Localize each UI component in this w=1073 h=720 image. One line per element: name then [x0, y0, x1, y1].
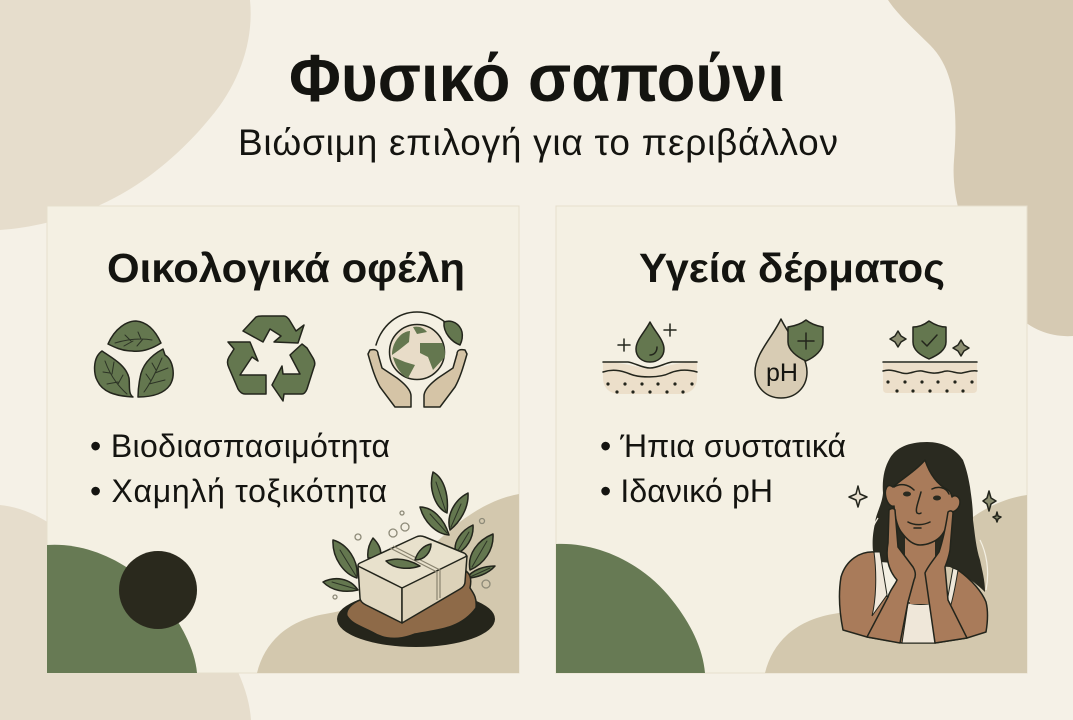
left hand and arm: [867, 508, 915, 643]
panel decor: tan blob: [257, 494, 519, 673]
right hand and arm: [925, 511, 967, 643]
background blob: bottom left: [0, 505, 251, 720]
icon: three leaves cycle: [95, 321, 173, 397]
heading: ecological benefits: Οικολογικά οφέλη: [107, 245, 465, 291]
bullet: ideal pH: • Ιδανικό pH: [600, 473, 773, 509]
facial features: [894, 485, 949, 528]
panel: ecological benefits: [47, 206, 519, 673]
bullet: biodegradability: • Βιοδιασπασιμότητα: [90, 428, 390, 464]
bullet: low toxicity: • Χαμηλή τοξικότητα: [90, 473, 387, 509]
heading: skin health: Υγεία δέρματος: [639, 245, 945, 291]
bullet: gentle ingredients: • Ήπια συστατικά: [600, 428, 846, 464]
icon: water drop on skin: [603, 322, 697, 394]
panel decor: green blob: [47, 545, 197, 673]
hair: [873, 442, 985, 592]
background blob: top right: [888, 0, 1073, 336]
background blob: top left: [0, 0, 251, 230]
illustration: soap bar with leaves: [323, 472, 495, 647]
body: [840, 552, 988, 643]
subtitle: Βιώσιμη επιλογή για το περιβάλλον: [238, 122, 838, 163]
illustration: woman touching face: [840, 442, 1001, 643]
panel decor: green blob: [556, 544, 705, 673]
icon: hands holding globe: [368, 312, 467, 407]
title: Φυσικό σαπούνι: [289, 41, 785, 116]
icon: recycle arrows: [228, 316, 315, 401]
neck: [905, 535, 935, 604]
face: [885, 460, 960, 545]
icon: pH drop with shield: pH: [766, 359, 798, 387]
panel decor: tan blob: [765, 495, 1027, 673]
panel: skin health: [556, 206, 1027, 673]
top straps and garment: [872, 552, 958, 616]
icon: shield over healthy skin: [883, 321, 977, 393]
panel decor: dark circle: [119, 551, 197, 629]
icon: pH drop with shield: [755, 319, 823, 398]
